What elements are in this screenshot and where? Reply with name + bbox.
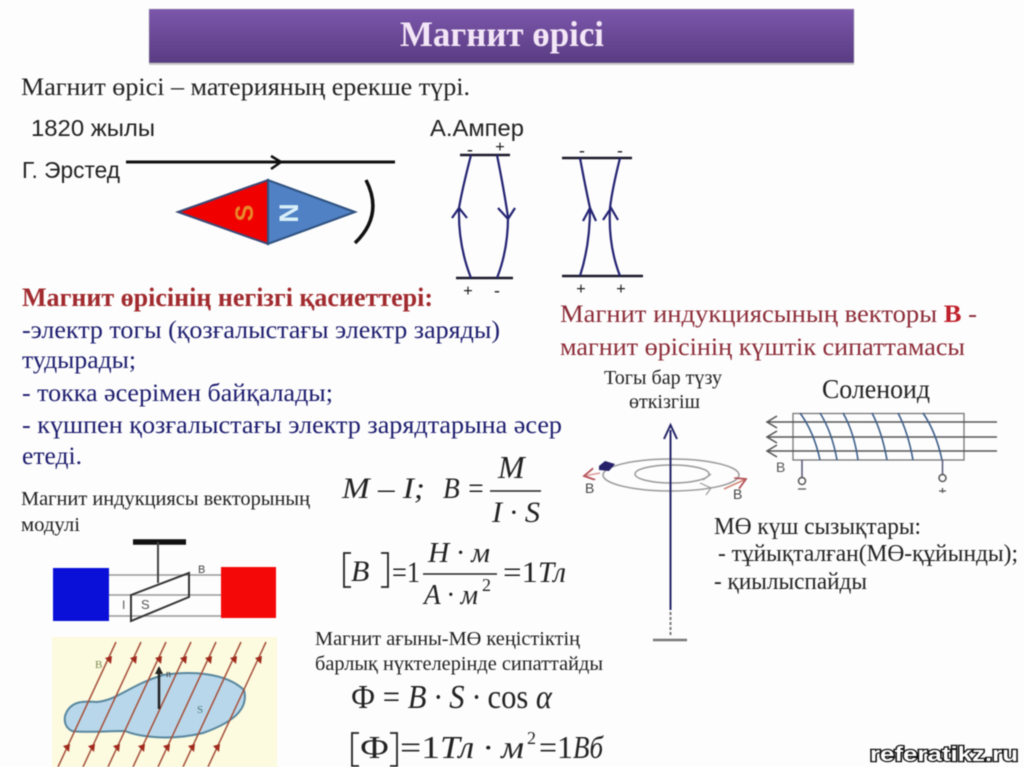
diagram: opposite currents: - [579, 141, 585, 160]
definition text: Магнит өрісі – материяның ерекше түрі. [21, 74, 470, 101]
diagram: field rings around conductor: В [733, 486, 742, 502]
watermark: referatikz.ru [870, 744, 1018, 766]
formula: tesla unit: Тл [538, 556, 566, 589]
panel: solenoid [767, 374, 997, 493]
diagram: current loop between magnet poles: S [141, 597, 150, 612]
text block: field line properties [714, 514, 1018, 595]
callout: induction vector: Магнит индукциясының векторы В - [560, 301, 977, 328]
diagram: magnetic flux through surface: n [166, 669, 171, 680]
icon: compass needle: S [231, 205, 259, 221]
diagram: field rings around conductor: В [585, 480, 594, 496]
text block: magnetic flux [315, 628, 603, 675]
panel: properties list: тудырады; [22, 347, 136, 374]
formula: weber unit: =1 [400, 729, 440, 765]
text block: induction vector modulus: Магнит индукциясы векторының [21, 488, 310, 510]
panel: solenoid: Соленоид [822, 374, 930, 404]
diagram: opposite currents: + [576, 279, 586, 298]
diagram: opposite currents: + [463, 281, 473, 300]
formula: induction: I · S [491, 496, 540, 529]
diagram: magnetic flux through surface [52, 637, 277, 767]
panel: Ampere experiment [430, 115, 643, 300]
formula: weber unit: Ф [360, 729, 389, 765]
panel: properties list [22, 283, 562, 470]
text block: magnetic flux: Магнит ағыны-МӨ кеңістіктің [315, 628, 580, 650]
callout: induction vector: магнит өрісінің күштік сипаттамасы [560, 334, 965, 361]
arrow: current wire [126, 156, 395, 169]
formula: tesla unit: =1 [392, 556, 420, 589]
arrow: deflection arc [355, 180, 373, 243]
formula: induction: M – I; [341, 472, 425, 505]
formula: weber unit: 2 [527, 728, 536, 748]
heading: Магнит өрісінің негізгі қасиеттері: [22, 283, 433, 312]
text block: field line properties: МӨ күш сызықтары: [714, 514, 921, 540]
formula: induction [341, 449, 541, 529]
text block: field line properties: - тұйықталған(МӨ-құйынды); [718, 541, 1018, 567]
panel: Oersted experiment: Г. Эрстед [22, 157, 121, 183]
title banner [149, 9, 854, 65]
formula: weber unit: =1 [539, 729, 573, 765]
formula: induction: M [497, 449, 527, 485]
formula: tesla unit: B [351, 555, 369, 588]
panel: Oersted experiment [22, 115, 395, 244]
formula: weber unit: Тл · м [440, 729, 524, 765]
formula: tesla unit: =1 [503, 556, 538, 589]
formula: weber unit: Вб [573, 729, 604, 765]
text block: magnetic flux: барлық нүктелерінде сипаттайды [315, 653, 603, 675]
text block: induction vector modulus [21, 488, 310, 536]
panel: properties list: - токка әсерімен байқалады; [22, 380, 333, 407]
diagram: field rings around conductor [584, 425, 746, 640]
diagram: solenoid coil [767, 413, 997, 493]
diagram: opposite currents: + [495, 137, 505, 156]
icon: compass needle: N [274, 203, 304, 223]
formula: tesla unit: H · м [427, 537, 490, 569]
icon: compass needle [178, 180, 355, 244]
diagram: opposite currents: + [616, 279, 626, 298]
panel: straight conductor: Тогы бар түзу [604, 367, 722, 389]
diagram: magnetic flux through surface: S [197, 704, 203, 716]
panel: straight conductor: өткізгіш [629, 391, 701, 413]
formula: flux: Ф = B · S · cos α [351, 679, 553, 716]
formula: induction: B = [443, 472, 485, 505]
diagram: opposite currents: - [494, 281, 500, 300]
text block: field line properties: - қиылыспайды [714, 569, 867, 595]
panel: properties list: -электр тогы (қозғалыстағы электр заряды) [22, 317, 500, 344]
diagram: current loop between magnet poles: В [198, 564, 205, 576]
diagram: opposite currents: - [617, 141, 623, 160]
formula: tesla unit [344, 537, 566, 611]
panel: Oersted experiment: 1820 жылы [31, 115, 155, 141]
diagram: opposite currents [452, 137, 643, 300]
panel: properties list: - күшпен қозғалыстағы электр зарядтарына әсер [22, 412, 562, 439]
formula: weber unit [352, 728, 604, 766]
panel: properties list: етеді. [22, 443, 82, 470]
diagram: current loop between magnet poles [53, 542, 276, 621]
diagram: magnetic flux through surface: B [95, 659, 102, 671]
diagram: opposite currents: - [467, 140, 473, 159]
text block: induction vector modulus: модулі [21, 514, 80, 536]
panel: straight conductor [584, 367, 746, 640]
callout: induction vector [560, 301, 977, 361]
diagram: current loop between magnet poles: I [122, 598, 125, 612]
diagram: solenoid coil: В [776, 459, 785, 475]
formula: tesla unit: A · м [422, 579, 478, 611]
formula: tesla unit: 2 [482, 575, 491, 595]
title: Магнит өрісі [400, 14, 604, 54]
panel: Ampere experiment: А.Ампер [430, 115, 524, 141]
